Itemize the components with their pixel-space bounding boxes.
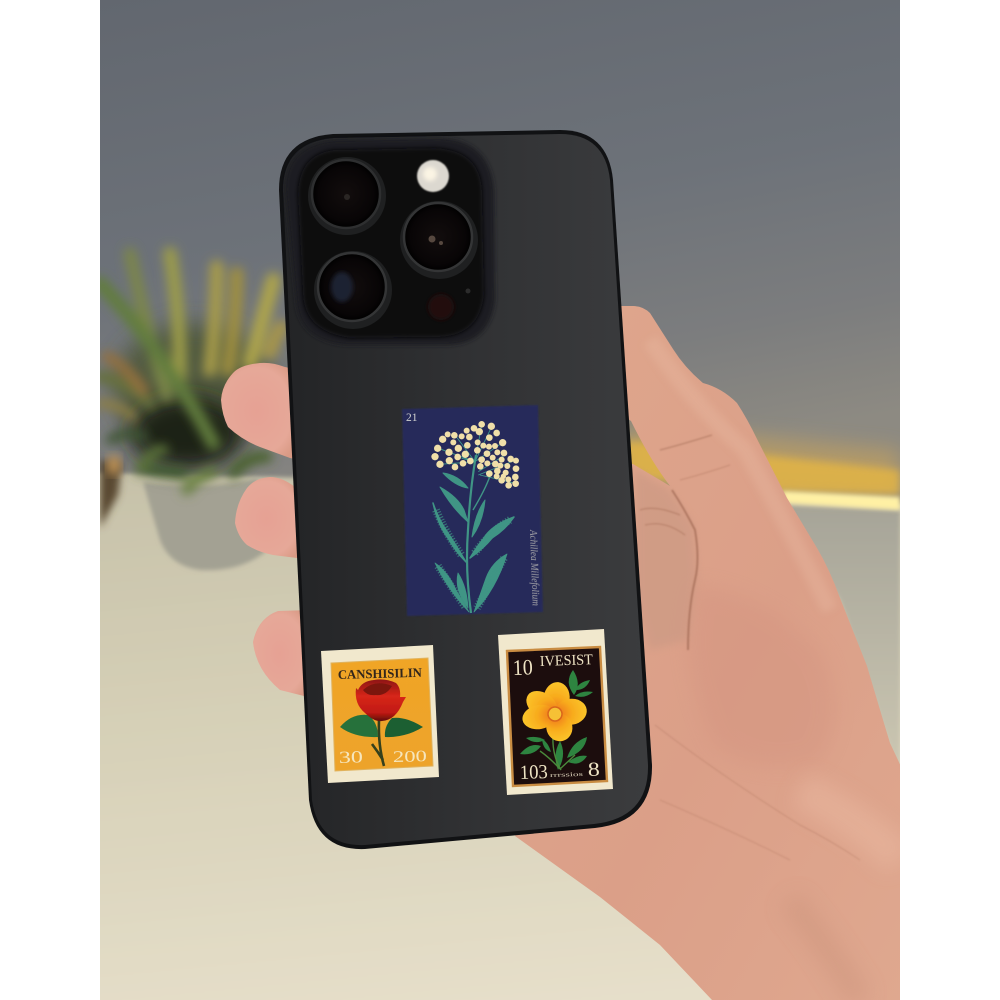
green leaves bbox=[520, 670, 593, 770]
product photo: phone with stamp stickers held in hand bbox=[100, 0, 900, 1000]
botanical caption: Achillea Millefolium bbox=[527, 529, 541, 606]
left background pot bbox=[100, 460, 122, 528]
flash bbox=[417, 160, 449, 192]
stamp values: 103 bbox=[519, 761, 548, 784]
camera module bbox=[285, 138, 495, 345]
red rose bloom bbox=[356, 679, 406, 721]
finger: index tip bbox=[221, 362, 292, 458]
sticker: orange stamp with red rose: 200 bbox=[393, 748, 427, 766]
shaded table at right bbox=[791, 504, 900, 764]
yellow flower bbox=[520, 681, 588, 745]
sticker: yarrow botanical print bbox=[402, 405, 543, 616]
yarrow flower cluster bbox=[431, 421, 519, 489]
plant pot bbox=[143, 478, 265, 570]
lens: bottom left bbox=[314, 251, 392, 329]
lens: right bbox=[400, 201, 478, 279]
table surface bbox=[60, 472, 940, 1000]
finger: ring tip bbox=[253, 610, 304, 696]
stamp title: CANSHISILIN bbox=[338, 665, 423, 682]
lens: top left bbox=[308, 157, 386, 235]
sticker: dark stamp with yellow flower: IVESIST bbox=[540, 652, 593, 670]
sticker: orange stamp with red rose bbox=[321, 645, 439, 783]
finger web shading bbox=[637, 476, 694, 646]
lidar sensor bbox=[428, 294, 454, 320]
warm light strip glow bbox=[625, 425, 900, 510]
stamp values: 30 bbox=[339, 747, 363, 767]
leaves bbox=[340, 715, 378, 737]
palm shading bbox=[688, 585, 835, 767]
sticker: dark stamp with yellow flower bbox=[498, 629, 613, 795]
background wall bbox=[100, 0, 900, 520]
thumb and wrist highlights bbox=[665, 360, 830, 606]
stamp title: 10 bbox=[512, 654, 533, 680]
yarrow stem and leaves bbox=[433, 455, 514, 613]
sticker: dark stamp with yellow flower: rrrssios bbox=[550, 772, 584, 779]
finger: middle tip bbox=[235, 477, 297, 558]
hand: palm and thumb behind the phone bbox=[515, 306, 905, 1000]
phone body bbox=[279, 130, 652, 849]
stamp number: 21 bbox=[406, 412, 418, 424]
sticker: dark stamp with yellow flower: 8 bbox=[587, 759, 600, 781]
stem bbox=[372, 720, 384, 766]
palm crease lines bbox=[640, 435, 860, 860]
blurred potted plant bbox=[100, 253, 282, 570]
feathered leaf barbs bbox=[436, 510, 510, 608]
microphone dot bbox=[466, 288, 470, 294]
plant foliage bbox=[100, 253, 282, 490]
